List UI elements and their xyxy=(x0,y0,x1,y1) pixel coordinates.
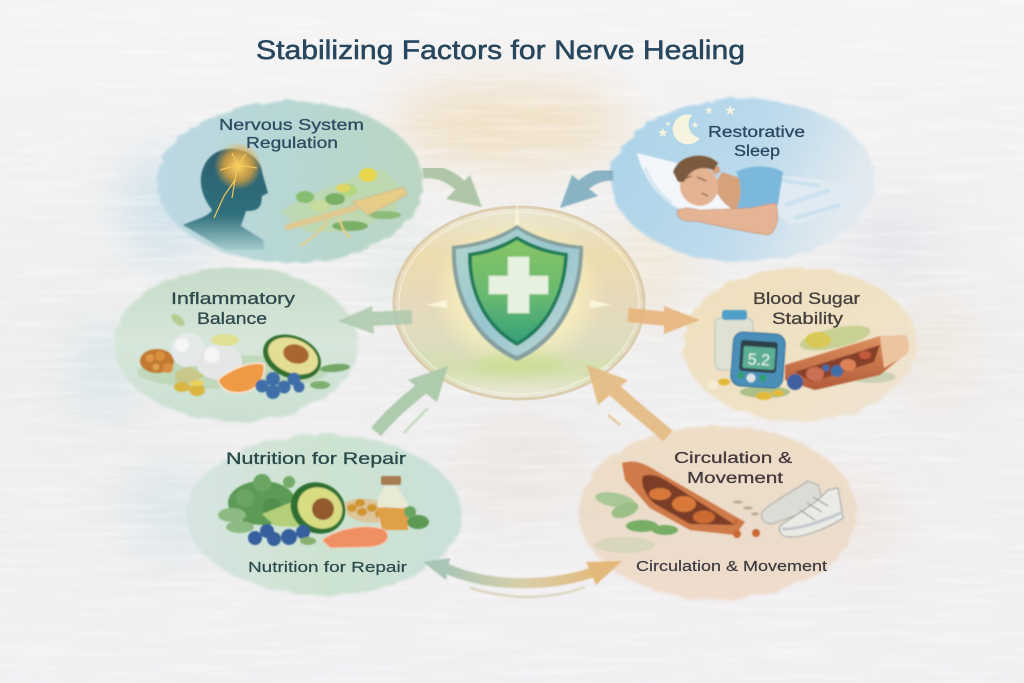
icon: anti-inflammatory foods xyxy=(137,312,350,399)
icon: moon and stars: ★ xyxy=(665,120,671,128)
arrow: Circulation to shield xyxy=(587,365,668,436)
arrow: Sleep to shield xyxy=(560,174,613,208)
label: Restorative Sleep: Restorative xyxy=(708,124,805,141)
label: Nutrition for Repair top: Nutrition for Repair xyxy=(226,450,407,468)
label: Inflammatory Balance: Inflammatory xyxy=(171,290,296,308)
title: Stabilizing Factors for Nerve Healing xyxy=(256,35,745,65)
label: Nervous System Regulation: Regulation xyxy=(246,135,338,152)
icon: herbal root and leaves xyxy=(280,168,407,246)
panel: Blood Sugar Stability xyxy=(683,268,917,422)
icon: moon and stars: ★ xyxy=(691,120,699,130)
icon: blood vessel, leaves and shoes xyxy=(594,462,843,553)
panel: Restorative Sleep xyxy=(611,98,875,262)
arrow: two-way Nutrition and Circulation xyxy=(423,558,622,597)
icon: glucose meter, bottle and blood vessel: 5.2 xyxy=(747,351,771,370)
panel: Nutrition for Repair xyxy=(186,435,462,595)
label: Restorative Sleep: Sleep xyxy=(734,143,780,160)
panel: Nervous System Regulation xyxy=(157,101,423,263)
icon: sleeping man xyxy=(637,153,860,235)
icon: moon and stars: ★ xyxy=(704,105,714,117)
icon: moon and stars: ★ xyxy=(724,102,737,118)
label: Blood Sugar Stability: Stability xyxy=(772,310,844,328)
label: Inflammatory Balance xyxy=(171,290,296,328)
label: Inflammatory Balance: Balance xyxy=(197,310,267,328)
label: Nutrition for Repair bottom: Nutrition for Repair xyxy=(248,559,407,576)
arrow: shield to Blood Sugar xyxy=(628,306,700,334)
icon: glucose meter, bottle and blood vessel xyxy=(707,310,909,400)
arrow: shield to Inflammatory Balance xyxy=(338,306,412,334)
label: Restorative Sleep xyxy=(708,124,805,160)
icon: head with glowing nerves xyxy=(183,142,268,250)
label: Circulation and Movement top: Circulation & xyxy=(674,450,792,467)
panel: Circulation and Movement xyxy=(579,426,857,600)
icon: nutrition foods xyxy=(218,473,429,548)
label: Circulation and Movement bottom: Circulation & Movement xyxy=(636,558,828,575)
label: Circulation and Movement top: Movement xyxy=(687,470,784,487)
label: Blood Sugar Stability: Blood Sugar xyxy=(753,290,861,308)
icon: moon and stars: ★ xyxy=(657,125,669,140)
label: Nervous System Regulation: Nervous System xyxy=(219,117,364,134)
icon: medical cross xyxy=(489,257,548,313)
label: Nervous System Regulation xyxy=(219,117,364,152)
label: Blood Sugar Stability xyxy=(753,290,861,328)
icon: shield xyxy=(452,225,583,361)
label: Circulation and Movement top xyxy=(674,450,792,487)
arrow: Nervous System to shield xyxy=(423,172,482,207)
panel: Inflammatory Balance xyxy=(114,267,358,421)
arrow: Nutrition to shield xyxy=(376,366,448,433)
icon: moon and stars xyxy=(657,102,737,144)
panel: central shield xyxy=(394,198,644,399)
